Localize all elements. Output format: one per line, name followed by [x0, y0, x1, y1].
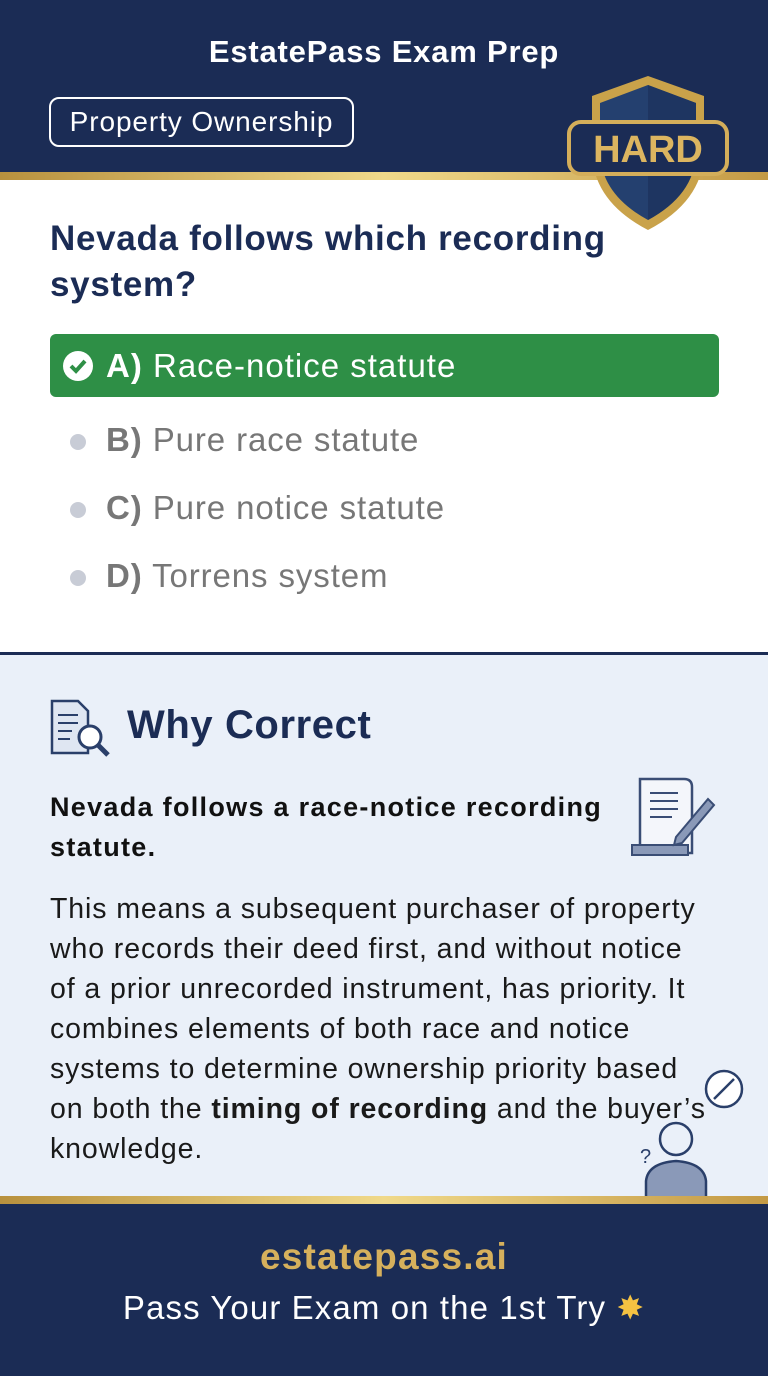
body paragraph: knowledge.: [50, 1133, 203, 1165]
icon: HARD shield badge: HARD: [593, 129, 703, 171]
header title: EstatePass Exam Prep: [209, 34, 559, 69]
icon: confused person: [640, 1070, 744, 1196]
icon: deed with pen: [631, 778, 716, 856]
question: [50, 219, 606, 304]
body paragraph: This means a subsequent purchaser of property: [50, 893, 696, 925]
header band: [0, 0, 768, 174]
footer: [0, 1204, 768, 1376]
question: Nevada follows which recording: [50, 219, 606, 258]
answer D: D) Torrens system: [106, 557, 388, 594]
answer A correct: A) Race-notice statute: [106, 347, 456, 384]
summary statement: Nevada follows a race-notice recording: [50, 792, 602, 822]
body paragraph: systems to determine ownership priority based: [50, 1053, 678, 1085]
question: system?: [50, 265, 197, 304]
icon: HARD shield badge: [567, 76, 729, 230]
answer A correct: [50, 334, 719, 397]
category pill: [49, 97, 354, 147]
icon: document magnifier: [50, 700, 110, 757]
footer tagline: Pass Your Exam on the 1st Try ✸: [123, 1289, 645, 1326]
icon: check: [63, 351, 93, 381]
category pill: Property Ownership: [70, 106, 333, 137]
body paragraph: [50, 893, 706, 1165]
icon: confused person: ?: [640, 1146, 651, 1168]
body paragraph: of a prior unrecorded instrument, has priority. It: [50, 973, 685, 1005]
body paragraph: who records their deed first, and without notice: [50, 933, 683, 965]
footer url: estatepass.ai: [260, 1236, 508, 1277]
summary statement: [50, 792, 602, 862]
summary statement: statute.: [50, 832, 156, 862]
body paragraph: combines elements of both race and notice: [50, 1013, 630, 1045]
answer B: B) Pure race statute: [106, 421, 419, 458]
answer C: C) Pure notice statute: [106, 489, 445, 526]
heading: Why Correct: Why Correct: [127, 703, 371, 747]
body paragraph: on both the timing of recording and the buyer’s: [50, 1093, 706, 1125]
panel: explanation: [0, 652, 768, 1198]
